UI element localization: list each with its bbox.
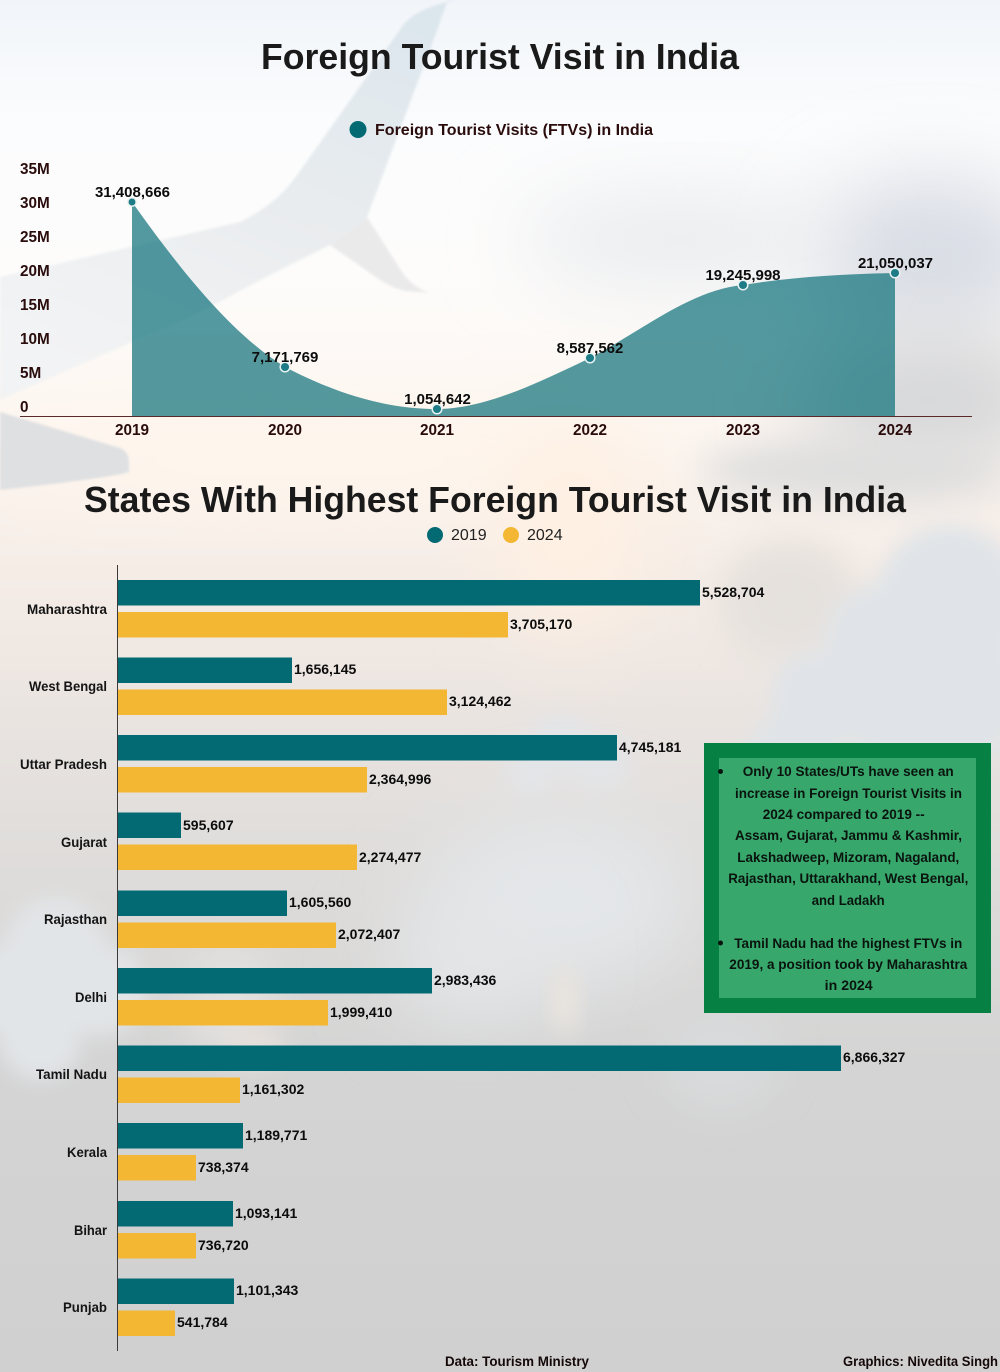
row: Tamil Nadu: [36, 1046, 905, 1103]
row: Uttar Pradesh: 2,364,996: [369, 771, 431, 787]
row: Maharashtra: [27, 580, 764, 638]
axis line: [20, 416, 972, 417]
data labels: 31,408,666: [95, 184, 170, 201]
row: Rajasthan: 2,072,407: [338, 926, 400, 942]
y axis labels: 30M: [20, 195, 50, 212]
data labels: 7,171,769: [252, 349, 318, 366]
callout: key findings: [704, 743, 991, 1013]
row: Gujarat: Gujarat: [61, 834, 107, 850]
clouds: [745, 525, 1000, 805]
legend: FTVs: Foreign Tourist Visits (FTVs) in India: [375, 122, 653, 139]
row: Tamil Nadu: 1,161,302: [242, 1081, 304, 1097]
row: Uttar Pradesh: Uttar Pradesh: [20, 756, 107, 772]
row: Delhi: 1,999,410: [330, 1004, 392, 1020]
y axis labels: 35M: [20, 161, 50, 178]
y axis labels: 25M: [20, 229, 50, 246]
row: Rajasthan: Rajasthan: [44, 911, 107, 927]
row: Uttar Pradesh: 4,745,181: [619, 739, 681, 755]
row: Delhi: Delhi: [75, 989, 107, 1005]
row: Maharashtra: 3,705,170: [510, 616, 572, 632]
row: Rajasthan: [44, 890, 400, 948]
y axis labels: 20M: [20, 263, 50, 280]
y axis labels: 10M: [20, 331, 50, 348]
callout: key findings: Rajasthan, Uttarakhand, West Bengal,: [728, 870, 968, 886]
data labels: 1,054,642: [404, 391, 471, 408]
legend: years: 2019: [451, 527, 487, 544]
legend: years: 2024: [527, 527, 563, 544]
row: Kerala: 1,189,771: [245, 1127, 307, 1143]
callout: key findings: 2019, a position took by Maharashtra: [729, 956, 967, 972]
x axis labels: 2022: [573, 422, 607, 439]
row: Uttar Pradesh: [20, 735, 681, 792]
row: Tamil Nadu: 6,866,327: [843, 1049, 905, 1065]
heading: states: States With Highest Foreign Tourist Visit in India: [84, 479, 907, 520]
bar chart: states: [20, 565, 905, 1351]
row: Kerala: 738,374: [198, 1159, 249, 1175]
row: West Bengal: 1,656,145: [294, 661, 356, 677]
x axis labels: 2021: [420, 422, 455, 439]
data labels: 21,050,037: [858, 255, 933, 272]
x axis labels: 2019: [115, 422, 149, 439]
row: Punjab: [63, 1278, 298, 1336]
callout: key findings: and Ladakh: [812, 892, 885, 908]
callout: key findings: Tamil Nadu had the highest FTVs in: [734, 935, 962, 951]
row: Delhi: [75, 968, 496, 1026]
area chart: foreign tourist visits: [20, 161, 972, 439]
data labels: 8,587,562: [557, 340, 623, 357]
area: [132, 202, 895, 416]
row: Tamil Nadu: Tamil Nadu: [36, 1066, 107, 1082]
row: Bihar: [74, 1201, 297, 1258]
row: Rajasthan: 1,605,560: [289, 894, 351, 910]
row: Kerala: [67, 1123, 307, 1180]
row: West Bengal: 3,124,462: [449, 693, 511, 709]
callout: key findings: in 2024: [825, 977, 873, 993]
row: Bihar: Bihar: [74, 1222, 107, 1238]
row: Maharashtra: 5,528,704: [702, 584, 764, 600]
row: Bihar: 1,093,141: [235, 1205, 297, 1221]
data labels: 19,245,998: [705, 267, 781, 284]
callout: key findings: Assam, Gujarat, Jammu & Kashmir,: [735, 827, 962, 843]
row: Maharashtra: Maharashtra: [27, 601, 107, 617]
source note: Data: Tourism Ministry: [445, 1353, 589, 1369]
row: West Bengal: West Bengal: [29, 678, 107, 694]
row: Gujarat: [61, 812, 421, 870]
x axis labels: 2023: [726, 422, 760, 439]
row: Punjab: 1,101,343: [236, 1282, 298, 1298]
callout: key findings: 2024 compared to 2019 --: [763, 806, 925, 822]
callout: key findings: increase in Foreign Tourist Visits in: [735, 785, 962, 801]
y axis labels: 5M: [20, 365, 41, 382]
legend: years: [427, 527, 563, 544]
row: Kerala: Kerala: [67, 1144, 107, 1160]
row: Gujarat: 595,607: [183, 817, 234, 833]
data points: [128, 198, 900, 414]
x axis labels: 2020: [268, 422, 302, 439]
callout: key findings: Lakshadweep, Mizoram, Nagaland,: [737, 849, 959, 865]
plane tail and wing: [0, 0, 455, 490]
y axis labels: 15M: [20, 297, 50, 314]
x axis labels: [115, 422, 913, 439]
title: Foreign Tourist Visit in India: [261, 36, 740, 77]
row: Punjab: 541,784: [177, 1314, 228, 1330]
y axis labels: [20, 161, 50, 416]
row: Delhi: 2,983,436: [434, 972, 496, 988]
y axis labels: 0: [20, 399, 29, 416]
row: Gujarat: 2,274,477: [359, 849, 421, 865]
callout: key findings: Only 10 States/UTs have seen an: [743, 763, 954, 779]
x axis labels: 2024: [878, 422, 913, 439]
row: Punjab: Punjab: [63, 1299, 107, 1315]
data labels: [95, 184, 933, 408]
row: West Bengal: [29, 658, 511, 715]
row: Bihar: 736,720: [198, 1237, 249, 1253]
